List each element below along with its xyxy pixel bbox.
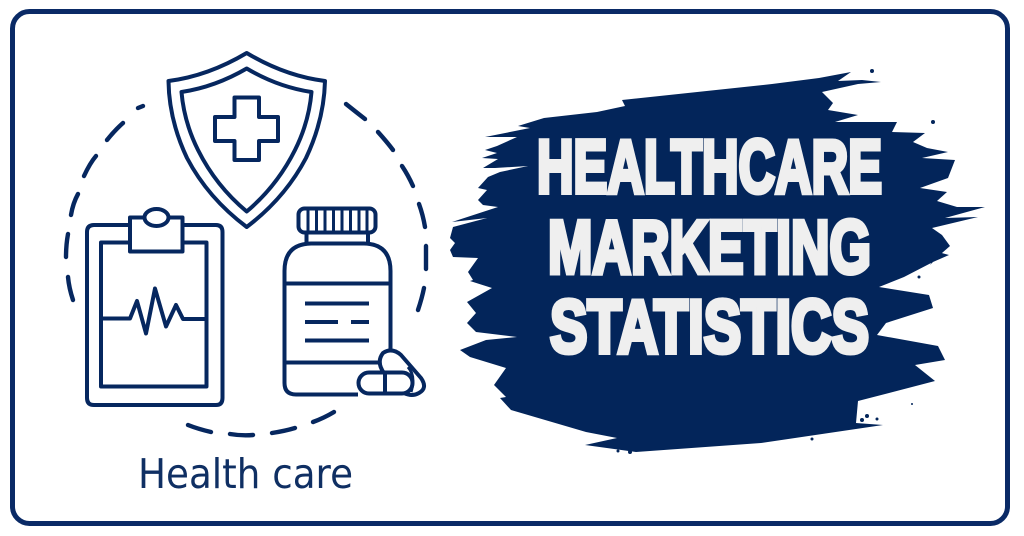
icon: cross: [215, 98, 278, 160]
pulse line: [102, 288, 206, 334]
icon: medicine bottle: [284, 208, 424, 395]
caption: Health care: Health care: [138, 450, 353, 498]
icon: pills: [358, 350, 424, 395]
brush stroke panel: [450, 69, 985, 454]
icon: dashed circle: [66, 104, 426, 435]
title line 2: MARKETING: [548, 205, 871, 289]
icon: clipboard: [87, 209, 222, 405]
title: [537, 124, 882, 368]
title line 3: STATISTICS: [550, 284, 869, 368]
paint flecks: [616, 69, 935, 454]
icon: shield: [168, 53, 325, 227]
